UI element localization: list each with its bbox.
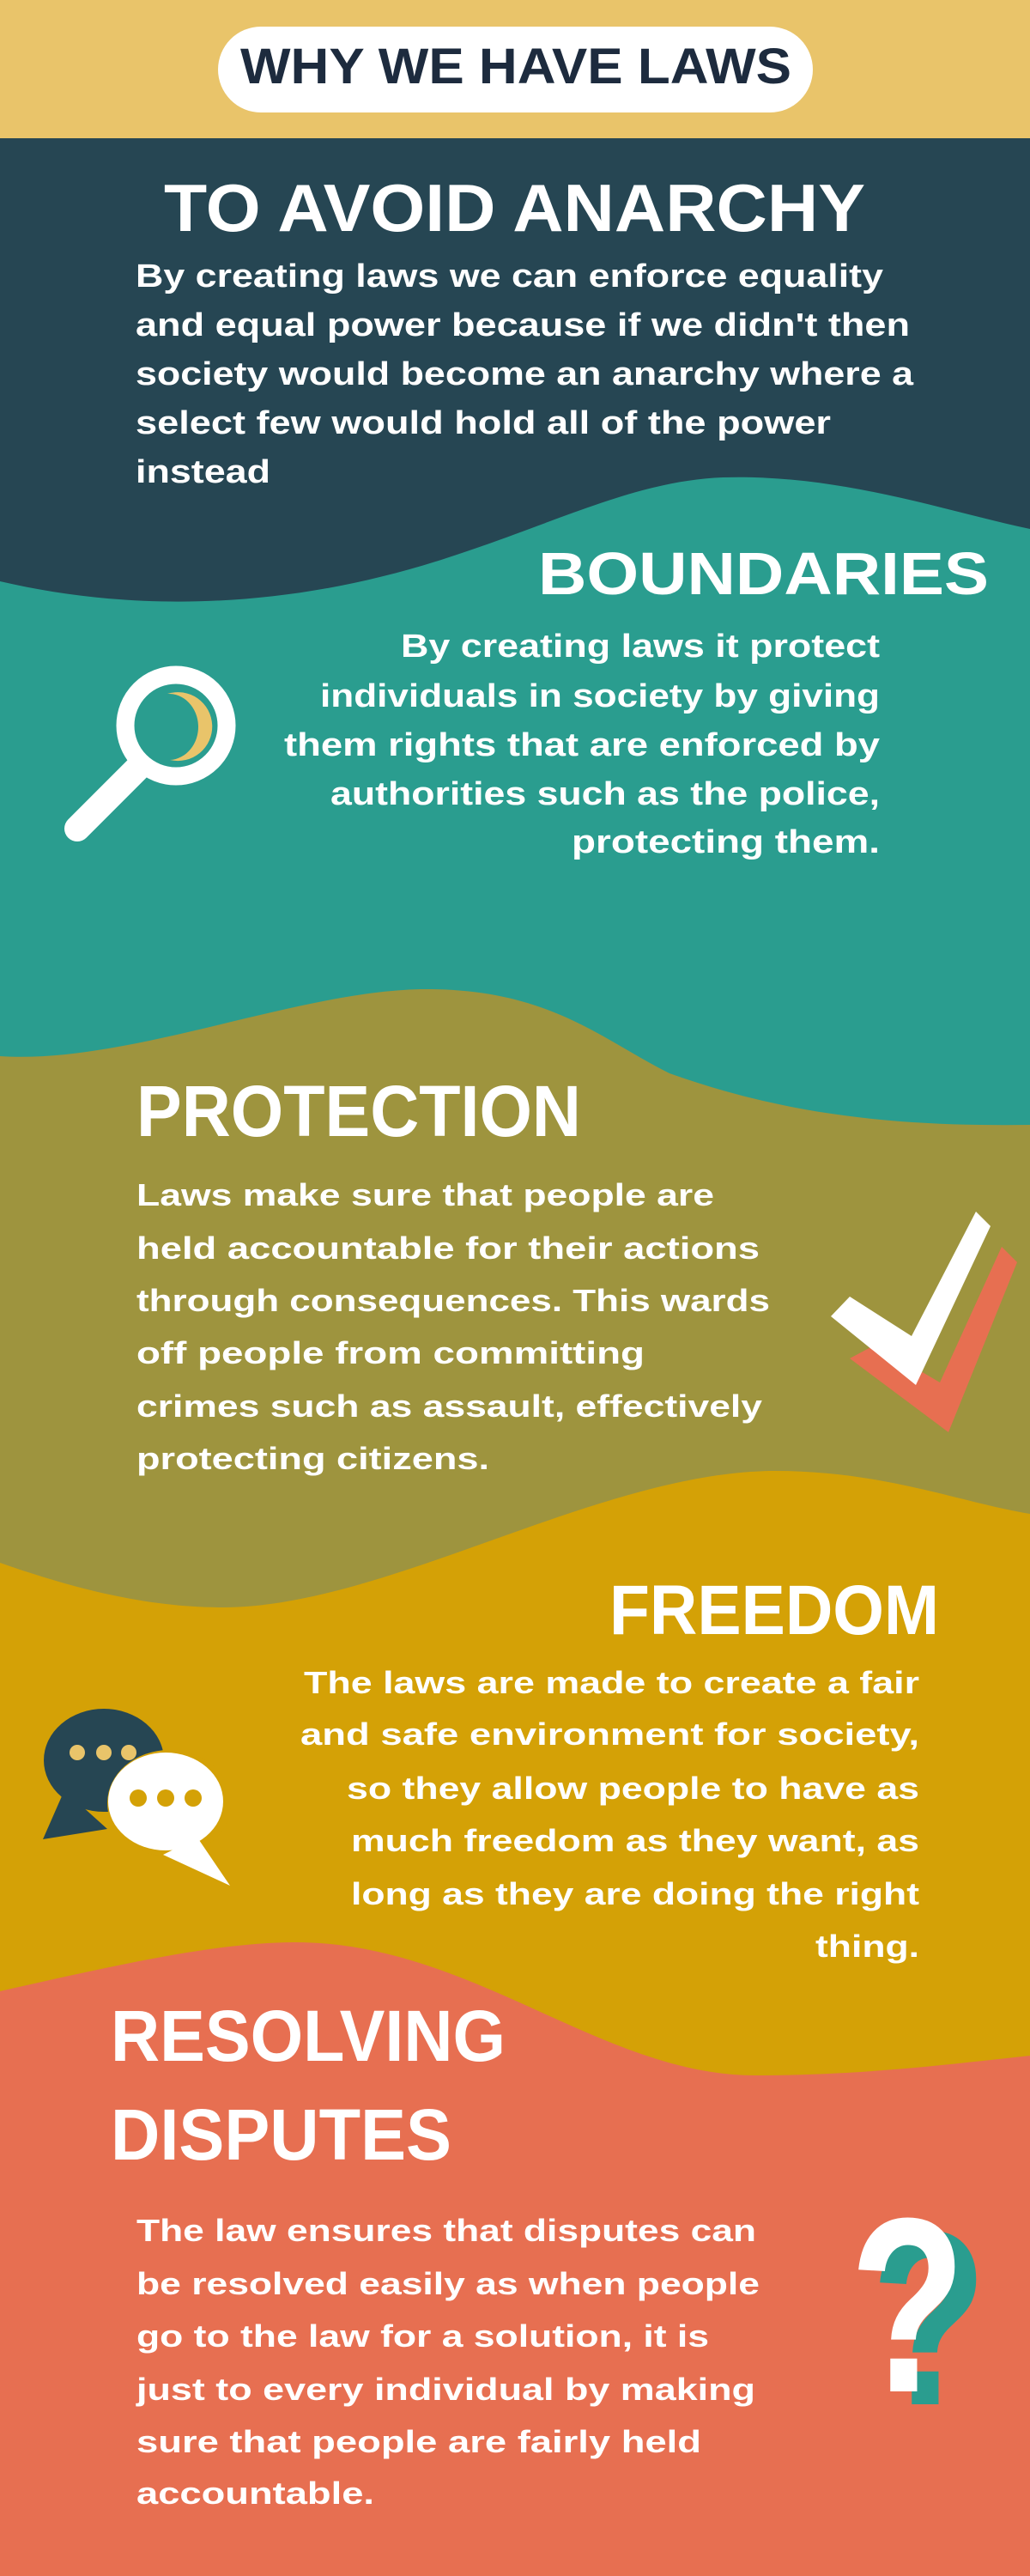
text block: freedom: The laws are made to create a fair: [304, 1665, 919, 1700]
text block: freedom: so they allow people to have as: [347, 1771, 919, 1806]
text block: anarchy: and equal power because if we didn't then: [136, 307, 910, 343]
heading: boundaries: BOUNDARIES: [538, 540, 989, 607]
title pill: WHY WE HAVE LAWS: [240, 39, 791, 94]
text block: freedom: and safe environment for society,: [300, 1716, 919, 1752]
panel: protection background: [0, 989, 1030, 1631]
text block: protection: crimes such as assault, effectively: [136, 1388, 762, 1424]
text block: boundaries: authorities such as the police,: [330, 776, 880, 812]
text block: anarchy: By creating laws we can enforce equality: [136, 258, 883, 295]
heading: resolving disputes: [111, 1996, 506, 2175]
heading: protection: PROTECTION: [136, 1071, 581, 1151]
text block: resolving: accountable.: [136, 2476, 374, 2511]
text block: protection: [136, 1177, 770, 1476]
text block: boundaries: [284, 629, 880, 860]
heading: freedom: FREEDOM: [609, 1571, 939, 1649]
text block: protection: protecting citizens.: [136, 1441, 489, 1476]
text block: protection: off people from committing: [136, 1335, 645, 1370]
panel: anarchy background: [0, 138, 1030, 653]
text block: resolving: just to every individual by making: [136, 2372, 755, 2407]
icon: magnifying glass: [77, 675, 227, 829]
text block: anarchy: society would become an anarchy where a: [136, 356, 914, 392]
header band: [0, 0, 1030, 146]
heading: resolving disputes: RESOLVING: [111, 1996, 506, 2076]
text block: anarchy: instead: [136, 454, 270, 490]
icon: question mark: ?: [850, 2166, 966, 2445]
text block: boundaries: individuals in society by giving: [320, 678, 880, 714]
text block: boundaries: By creating laws it protect: [401, 629, 880, 665]
text block: resolving: go to the law for a solution, it is: [136, 2318, 709, 2354]
text block: resolving: sure that people are fairly held: [136, 2424, 701, 2459]
icon: chat bubbles: [43, 1709, 231, 1886]
heading: resolving disputes: DISPUTES: [111, 2094, 451, 2175]
text block: freedom: much freedom as they want, as: [351, 1823, 919, 1858]
icon: checkmark: [831, 1212, 1017, 1432]
panel: freedom background: [0, 1471, 1030, 2104]
panel: resolving background: [0, 1942, 1030, 2576]
text block: freedom: long as they are doing the right: [351, 1876, 919, 1911]
text block: protection: Laws make sure that people are: [136, 1177, 714, 1212]
text block: resolving: be resolved easily as when people: [136, 2266, 760, 2301]
panel: boundaries background: [0, 477, 1030, 1202]
text block: resolving: [136, 2213, 760, 2511]
text block: boundaries: protecting them.: [572, 824, 880, 860]
text block: boundaries: them rights that are enforced by: [284, 727, 880, 763]
text block: protection: held accountable for their actions: [136, 1230, 760, 1266]
text block: anarchy: select few would hold all of the power: [136, 405, 831, 441]
text block: anarchy: [136, 258, 914, 490]
text block: freedom: thing.: [815, 1929, 919, 1964]
text block: resolving: The law ensures that disputes can: [136, 2213, 756, 2248]
title pill: [218, 27, 813, 112]
icon: question mark: ?: [871, 2179, 987, 2458]
text block: protection: through consequences. This wards: [136, 1283, 770, 1318]
text block: freedom: [300, 1665, 919, 1964]
heading: to avoid anarchy: TO AVOID ANARCHY: [164, 170, 865, 246]
